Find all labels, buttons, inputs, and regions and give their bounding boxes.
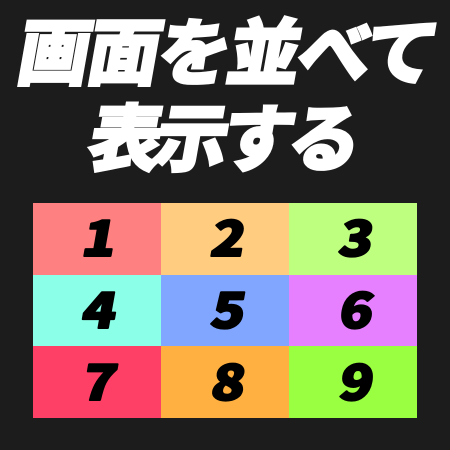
cell 2: [161, 201, 289, 275]
cell 2: 2: [207, 201, 253, 270]
title line 2: 表示する: [81, 82, 372, 187]
cell 1: 1: [78, 201, 124, 270]
cell 3: 3: [335, 201, 381, 270]
cell 6: [289, 273, 417, 346]
cell 1: [33, 201, 161, 275]
color grid: [33, 201, 417, 418]
cell 4: 4: [78, 273, 124, 342]
cell 3: [289, 201, 417, 275]
cell 5: 5: [207, 273, 253, 342]
cell 8: 8: [207, 345, 253, 414]
cell 7: 7: [78, 345, 124, 414]
cell 9: 9: [335, 345, 381, 414]
cell 6: 6: [335, 273, 381, 342]
cell 5: [161, 273, 289, 346]
cell 9: [289, 345, 417, 418]
cell 8: [161, 345, 289, 418]
cell 7: [33, 345, 161, 418]
cell 4: [33, 273, 161, 346]
